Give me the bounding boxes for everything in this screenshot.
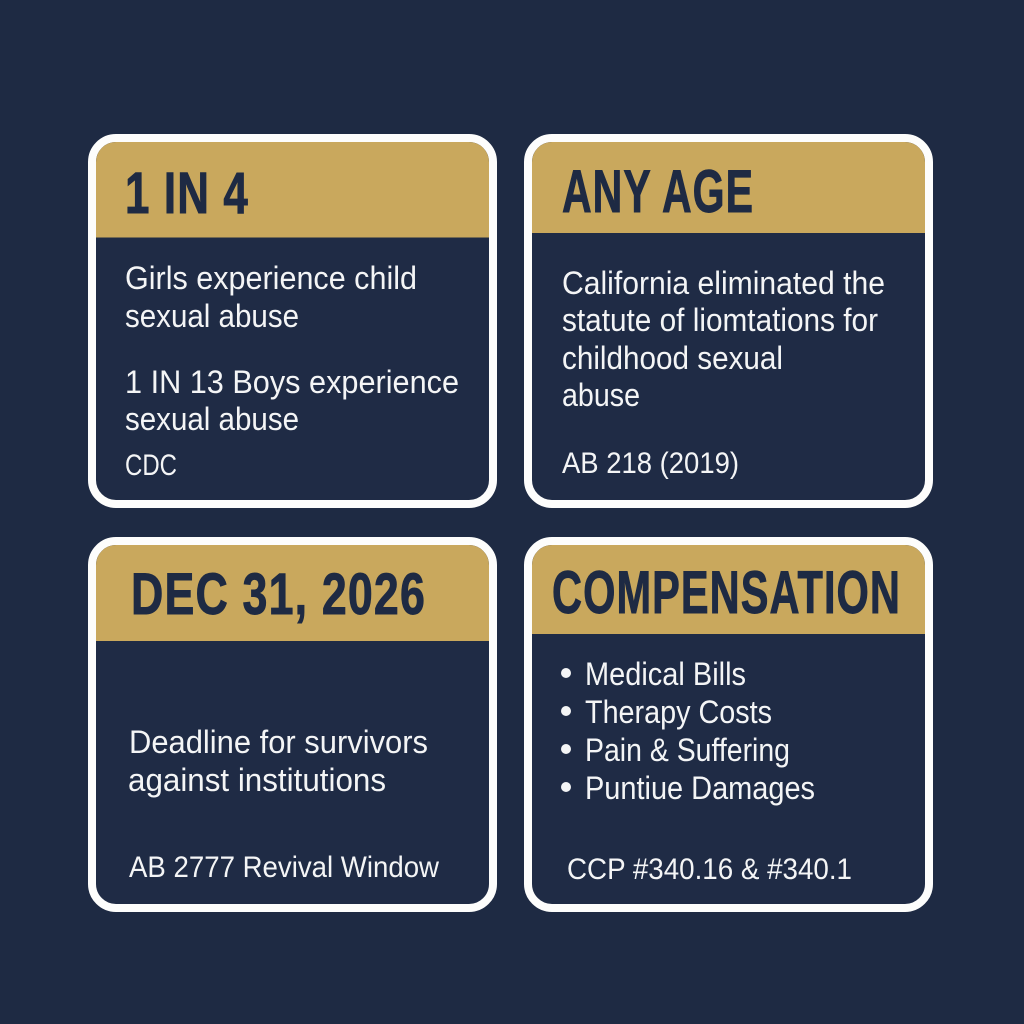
- panel: compensation: [528, 541, 929, 908]
- text: girls statistic: [125, 260, 417, 334]
- heading: any age: ANY AGE: [562, 158, 754, 225]
- list: compensation types: Therapy Costs: [585, 694, 772, 730]
- panel: deadline: [92, 541, 493, 908]
- header band: compensation: [532, 545, 925, 634]
- source: CCP sections: CCP #340.16 & #340.1: [567, 853, 852, 886]
- text: girls statistic: Girls experience child: [125, 260, 417, 296]
- list: compensation types: [561, 656, 815, 806]
- text: boys statistic: 1 IN 13 Boys experience: [125, 364, 459, 400]
- list: compensation types: Puntiue Damages: [585, 770, 815, 806]
- text: girls statistic: sexual abuse: [125, 298, 299, 334]
- source: AB 2777: AB 2777 Revival Window: [129, 851, 439, 884]
- source: CDC: CDC: [125, 449, 177, 482]
- panel: any age: [528, 138, 929, 504]
- text: deadline description: Deadline for survivors: [129, 724, 428, 760]
- source: AB 218: AB 218 (2019): [562, 447, 739, 480]
- heading: deadline date: DEC 31, 2026: [131, 562, 426, 627]
- text: statute description: abuse: [562, 377, 640, 413]
- text: deadline description: [128, 724, 428, 798]
- text: statute description: statute of liomtations for: [562, 302, 878, 338]
- panel: 1 in 4 statistic: [92, 138, 493, 504]
- text: boys statistic: sexual abuse: [125, 401, 299, 437]
- text: deadline description: against institutions: [128, 762, 386, 798]
- header band: any age: [532, 142, 925, 233]
- list: compensation types: Pain & Suffering: [585, 732, 790, 768]
- heading: 1 in 4: 1 IN 4: [125, 161, 249, 226]
- text: statute description: childhood sexual: [562, 340, 783, 376]
- text: statute description: [562, 265, 885, 413]
- text: statute description: California eliminated the: [562, 265, 885, 301]
- header band: deadline: [96, 545, 489, 641]
- header band: 1 in 4: [96, 142, 489, 238]
- list: compensation types: Medical Bills: [585, 656, 746, 692]
- text: boys statistic: [125, 364, 459, 437]
